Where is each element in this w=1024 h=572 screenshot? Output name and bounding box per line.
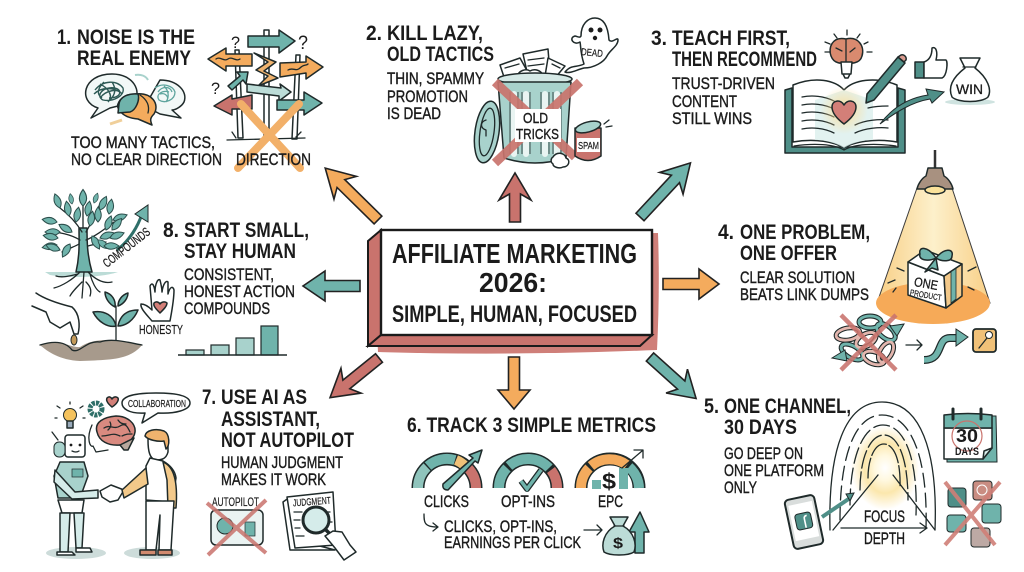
text: human judgment: HUMAN JUDGMENT (221, 454, 343, 472)
text: consistent honest action (184, 266, 295, 318)
icon: honesty hand with heart (141, 280, 174, 321)
central title text (392, 238, 637, 328)
icon: sprout (93, 292, 138, 340)
text: go deep: GO DEEP ON (724, 445, 803, 463)
heading 1: NOISE IS THE (77, 26, 195, 49)
icon: thumbs up (915, 48, 947, 78)
arrow to panel 6 (498, 357, 530, 409)
icon: spam can (574, 119, 612, 160)
heading 3 (651, 27, 817, 71)
label: opt-ins: OPT-INS (501, 493, 555, 511)
heading 2: KILL LAZY, (387, 22, 483, 45)
icon: 30 days calendar: DAYS (955, 446, 979, 458)
text: consistent honest action: HONEST ACTION (184, 283, 295, 301)
arrow to panel 1 (314, 157, 389, 231)
callout: collaboration: COLLABORATION (128, 399, 186, 410)
icon: spotlight lamp with product box: ONE (913, 274, 939, 293)
icon: 30 days calendar (944, 409, 997, 462)
icon: elbow arrow (424, 514, 438, 531)
heading 2 (366, 22, 494, 66)
text: thin spammy promotion (387, 70, 484, 123)
illustration: robot (46, 432, 106, 559)
heading 1: 1. (57, 26, 71, 49)
heading 3: TEACH FIRST, (672, 27, 790, 50)
text: go deep (724, 445, 824, 497)
arrow to panel 4 (663, 269, 719, 299)
text: human judgment (221, 454, 343, 489)
heading 8: 8. (163, 219, 179, 242)
icon: money bag with up arrow: $ (613, 535, 624, 552)
panel 2: kill lazy old tactics (366, 18, 618, 168)
heading 4: ONE PROBLEM, (740, 221, 870, 244)
text: thin spammy promotion: PROMOTION (387, 88, 468, 106)
arrow to panel 3 (628, 152, 702, 228)
heading 1 (57, 26, 195, 70)
icon: tree with roots (42, 190, 128, 298)
text: go deep: ONLY (724, 479, 757, 497)
icon: compounds arrow (100, 205, 153, 270)
label: focus depth: FOCUS (864, 508, 905, 526)
panel 4: one problem one offer (718, 150, 996, 370)
heading 7 (202, 386, 354, 452)
icon: judgment document and magnifier: JUDGMENT (293, 496, 331, 509)
heading 7: NOT AUTOPILOT (221, 429, 354, 452)
icon: win money bag (945, 58, 995, 105)
text: clear solution: CLEAR SOLUTION (740, 269, 855, 287)
heading 7: USE AI AS (221, 386, 307, 409)
heading 7: ASSISTANT, (221, 408, 320, 431)
heading 3: 3. (651, 27, 667, 50)
panel 6: track 3 simple metrics (407, 414, 656, 555)
icon: ghost labelled dead (565, 18, 618, 73)
arrow to panel 7 (320, 346, 389, 410)
icon: autopilot crossed out: AUTOPILOT (212, 495, 259, 509)
text: trust-driven content: CONTENT (672, 93, 737, 111)
text: trust-driven content (672, 75, 775, 128)
label: old tricks (516, 110, 559, 143)
label: old tricks: OLD (523, 110, 548, 127)
heading 4: 4. (718, 221, 734, 244)
panel 3: teach first (651, 27, 995, 153)
label: direction: DIRECTION (236, 151, 311, 169)
icon: compounds arrow: COMPOUNDS (100, 225, 153, 270)
heading 4: ONE OFFER (740, 242, 837, 265)
heading 2: 2. (366, 22, 382, 45)
icon: hand planting seed (32, 293, 142, 361)
icon: judgment document and magnifier (283, 492, 356, 560)
icon: money bag with up arrow (603, 512, 649, 555)
central title text: SIMPLE, HUMAN, FOCUSED (392, 301, 637, 328)
heading 5 (704, 395, 851, 439)
heading 8: STAY HUMAN (184, 240, 296, 263)
label: focus depth: DEPTH (864, 530, 905, 548)
heading 8: START SMALL, (184, 219, 309, 242)
panel 8: start small stay human (32, 190, 309, 361)
gauge: clicks (418, 450, 482, 490)
text: thin spammy promotion: THIN, SPAMMY (387, 70, 484, 88)
icon: crossed link pile (832, 315, 904, 370)
text: human judgment: MAKES IT WORK (221, 471, 326, 489)
icon: spotlight lamp with product box: PRODUCT (909, 287, 942, 303)
icon: brain (89, 416, 135, 452)
icon: confusing signposts: ? (298, 33, 308, 54)
gauge: epc (581, 450, 643, 494)
icon: trash can with old tricks (471, 49, 580, 168)
panel 1: noise is the real enemy (57, 26, 323, 169)
text: clicks opt-ins epc: EARNINGS PER CLICK (444, 534, 581, 552)
text: too many tactics: TOO MANY TACTICS, (71, 134, 215, 152)
text: clicks opt-ins epc (444, 518, 581, 552)
heading 5: 30 DAYS (724, 416, 797, 439)
icon: 30 days calendar: 30 (956, 426, 978, 446)
label: clicks: CLICKS (424, 493, 469, 511)
icon: confusing signposts: ? (231, 33, 240, 52)
bar chart: growth (178, 326, 287, 355)
central title text: 2026: (479, 267, 547, 298)
heading 7: 7. (202, 386, 216, 409)
heading 5: ONE CHANNEL, (724, 395, 851, 418)
heading 3: THEN RECOMMEND (672, 48, 817, 71)
label: focus depth (864, 508, 905, 548)
text: trust-driven content: STILL WINS (672, 110, 752, 128)
arrow to panel 5 (639, 345, 707, 410)
icon: tangled speech bubbles (86, 74, 185, 125)
icon: win money bag: WIN (956, 81, 983, 97)
arrow to panel 8 (303, 271, 360, 301)
label: old tricks: TRICKS (516, 126, 559, 143)
gauge: epc: $ (602, 469, 616, 494)
text: consistent honest action: CONSISTENT, (184, 266, 274, 284)
icon: clear path arrow (924, 329, 968, 360)
icon: key square (973, 329, 996, 352)
icon: autopilot crossed out (207, 495, 266, 555)
panel 7: use ai as assistant (46, 386, 356, 560)
icon: small arrow (906, 340, 922, 350)
text: thin spammy promotion: IS DEAD (387, 105, 441, 123)
text: clear solution (740, 269, 869, 304)
text: clicks opt-ins epc: CLICKS, OPT-INS, (444, 518, 557, 536)
icon: crossed-out social platforms (945, 481, 1001, 547)
icon: spotlight lamp with product box (876, 150, 990, 324)
panel 5: one channel 30 days (704, 395, 1001, 550)
icon: phone with arrow (784, 493, 854, 550)
text: too many tactics (71, 134, 222, 169)
heading 8 (163, 219, 309, 263)
heading 2: OLD TACTICS (387, 43, 494, 66)
icon: brain lightbulb (825, 30, 872, 78)
heading 6: 6. TRACK 3 SIMPLE METRICS (407, 414, 656, 437)
arrow to panel 2 (499, 173, 531, 222)
icon: open book with heart (785, 55, 944, 153)
text: trust-driven content: TRUST-DRIVEN (672, 75, 775, 93)
icon: arrow to money bag (584, 525, 602, 535)
text: go deep: ONE PLATFORM (724, 462, 824, 480)
icon: lightbulb gear heart (55, 397, 118, 428)
gauge: opt-ins (499, 459, 557, 489)
icon: focus tunnel (830, 402, 935, 533)
icon: spam can: SPAM (578, 141, 599, 152)
icon: confusing signposts (208, 30, 323, 168)
callout: collaboration (122, 393, 190, 423)
illustration: handshake (100, 485, 124, 502)
icon: ghost labelled dead: DEAD (580, 47, 603, 60)
text: too many tactics: NO CLEAR DIRECTION (71, 151, 222, 169)
central title text: AFFILIATE MARKETING (392, 238, 637, 269)
heading 5: 5. (704, 395, 719, 418)
heading 1: REAL ENEMY (77, 47, 191, 70)
text: consistent honest action: COMPOUNDS (184, 300, 270, 318)
heading 4 (718, 221, 870, 265)
illustration: human (122, 430, 180, 559)
central title box (368, 230, 659, 354)
label: honesty: HONESTY (139, 322, 183, 337)
icon: confusing signposts: ? (211, 79, 220, 98)
text: clear solution: BEATS LINK DUMPS (740, 286, 869, 304)
label: epc: EPC (598, 493, 623, 511)
